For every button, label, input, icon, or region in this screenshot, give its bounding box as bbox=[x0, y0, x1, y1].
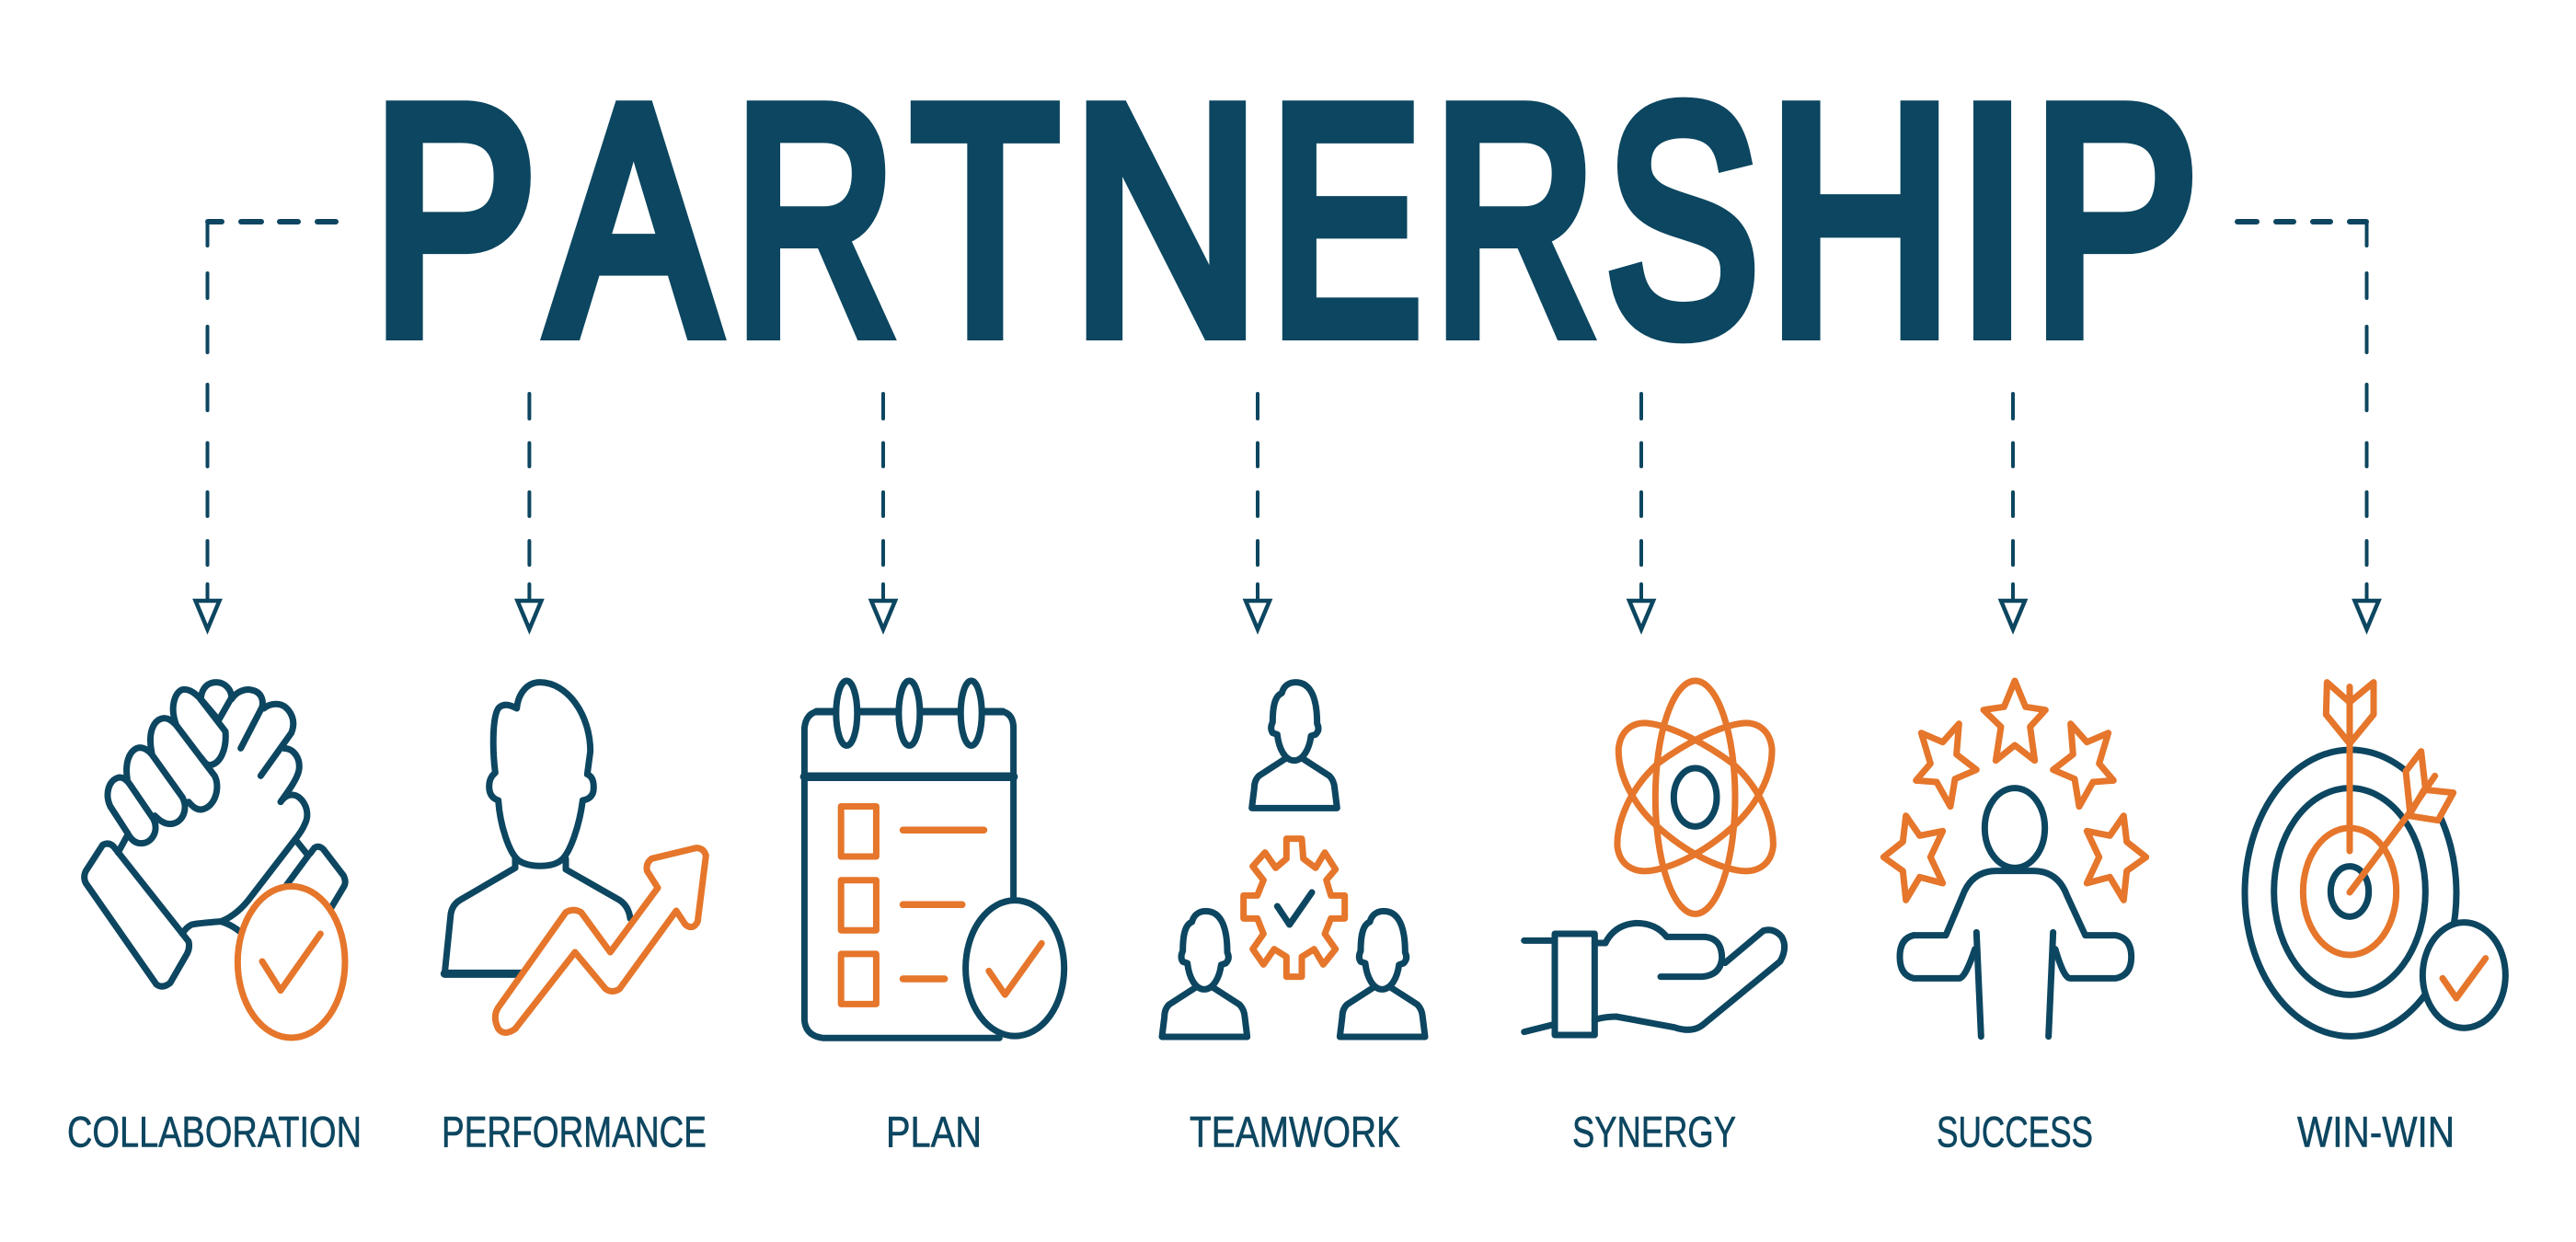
icon: calendar checklist bbox=[804, 681, 1064, 1038]
arrow: title to win-win bbox=[2237, 222, 2379, 629]
title: PARTNERSHIP: S bbox=[1606, 40, 1759, 400]
arrow: title to teamwork bbox=[1246, 394, 1270, 629]
panel: performance bbox=[442, 683, 707, 1156]
label: performance: PERFORMANCE bbox=[442, 1108, 707, 1156]
arrow: title to plan bbox=[871, 394, 895, 629]
panel: win-win bbox=[2245, 683, 2505, 1156]
label: collaboration: COLLABORATION bbox=[67, 1108, 362, 1156]
label: success: SUCCESS bbox=[1937, 1108, 2093, 1156]
label: plan: PLAN bbox=[886, 1108, 982, 1156]
icon: three people and gear bbox=[1162, 683, 1425, 1037]
panel: success bbox=[1883, 681, 2146, 1156]
title: PARTNERSHIP: R bbox=[735, 40, 895, 399]
title: PARTNERSHIP: A bbox=[550, 41, 718, 400]
title: PARTNERSHIP: I bbox=[1958, 40, 2027, 400]
label: teamwork: TEAMWORK bbox=[1190, 1108, 1400, 1156]
icon: person with rising arrow bbox=[444, 683, 706, 1032]
label: synergy: SYNERGY bbox=[1572, 1108, 1736, 1156]
icon: person with five stars bbox=[1883, 681, 2146, 1037]
title: PARTNERSHIP: P bbox=[373, 40, 536, 399]
panel: synergy bbox=[1524, 681, 1785, 1156]
icon: target with arrows bbox=[2245, 683, 2505, 1036]
title: PARTNERSHIP: T bbox=[912, 41, 1058, 400]
arrow: title to synergy bbox=[1629, 394, 1653, 629]
arrow: title to collaboration bbox=[195, 222, 336, 629]
panel: plan bbox=[804, 681, 1064, 1156]
label: win-win: WIN-WIN bbox=[2297, 1108, 2455, 1156]
title: PARTNERSHIP: E bbox=[1271, 40, 1421, 400]
icon: clasped hands with check bbox=[85, 683, 345, 1038]
icon: open hand bbox=[1524, 923, 1785, 1035]
arrow: title to performance bbox=[517, 394, 541, 629]
title: PARTNERSHIP: H bbox=[1768, 40, 1952, 399]
title: PARTNERSHIP: P bbox=[2033, 40, 2199, 400]
icon: atom bbox=[1617, 681, 1773, 914]
panel: collaboration bbox=[67, 683, 362, 1156]
title: PARTNERSHIP: R bbox=[1434, 40, 1595, 399]
panel: teamwork bbox=[1162, 683, 1425, 1156]
arrow: title to success bbox=[2001, 394, 2025, 629]
title: PARTNERSHIP bbox=[373, 40, 2199, 400]
title: PARTNERSHIP: N bbox=[1073, 40, 1259, 400]
